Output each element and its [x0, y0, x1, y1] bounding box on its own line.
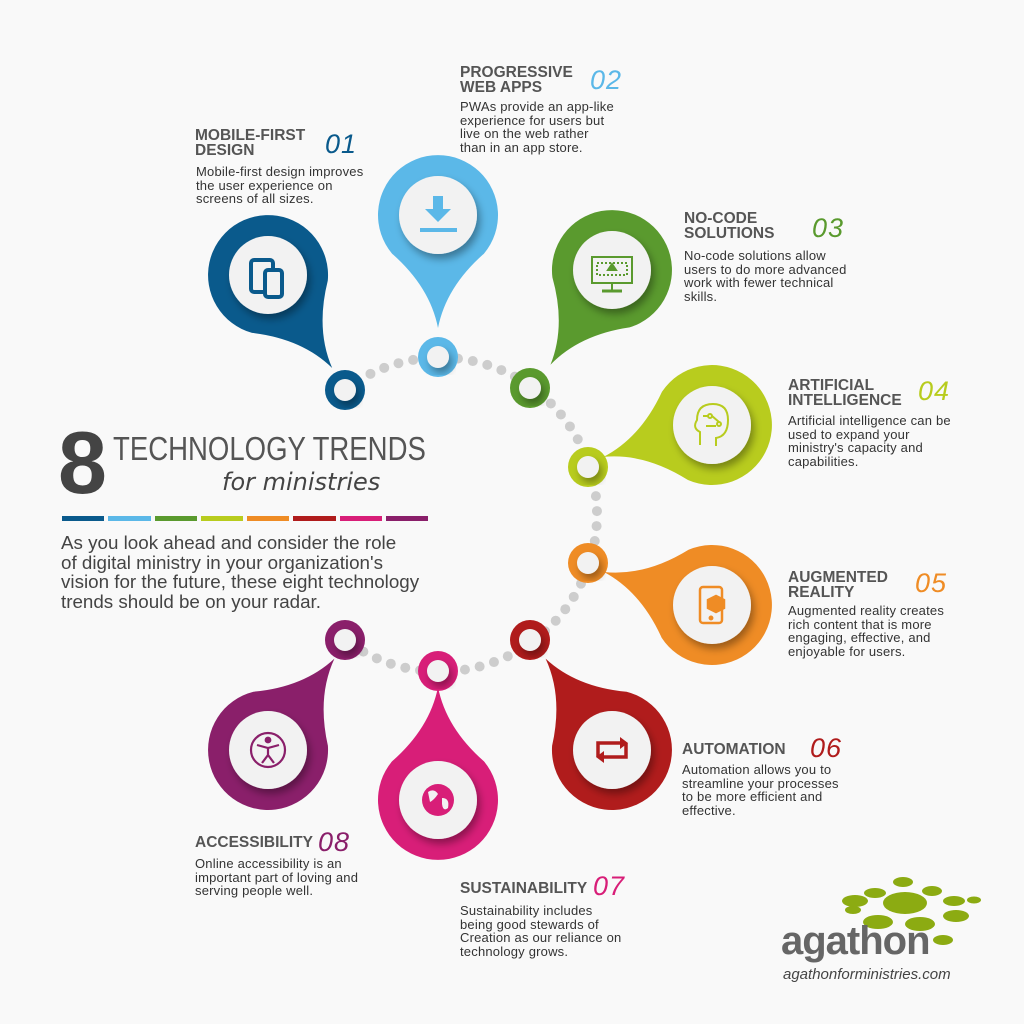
icon: monitor [592, 257, 632, 291]
text 4: ministry's capacity and [788, 440, 923, 455]
number 07: 07 [593, 871, 625, 901]
pin 6: automation [497, 623, 696, 834]
color bars [62, 516, 428, 521]
logo text: agathon [781, 919, 930, 963]
text 7: Sustainability includes [460, 903, 593, 918]
heading: 3 [684, 210, 774, 242]
text 4: Artificial intelligence can be [788, 413, 951, 428]
heading: 2: WEB APPS [460, 79, 542, 96]
text 3 [684, 248, 847, 304]
number 06: 06 [810, 733, 842, 763]
text 2: PWAs provide an app-like [460, 99, 614, 114]
text 7: being good stewards of [460, 916, 599, 932]
text 8: important part of loving and [195, 870, 358, 884]
icon: refresh arrows [596, 737, 628, 763]
number 05: 05 [915, 568, 947, 598]
text 5: rich content that is more [788, 616, 932, 632]
text 4: capabilities. [788, 454, 859, 468]
heading: 6: AUTOMATION [682, 741, 786, 758]
title block [58, 413, 426, 512]
title text: TECHNOLOGY TRENDS [113, 430, 426, 467]
heading: 5: AUGMENTED [788, 569, 888, 586]
text 2: than in an app store. [460, 140, 583, 154]
text 2: experience for users but [460, 112, 604, 128]
pin 5: AR [586, 515, 787, 680]
pin 1: mobile-first [185, 192, 382, 402]
heading: 8: ACCESSIBILITY [195, 834, 313, 851]
heading: 5 [788, 569, 888, 601]
number 01: 01 [325, 129, 357, 159]
text 7: technology grows. [460, 944, 568, 958]
number 08: 08 [318, 827, 350, 857]
text 4 [788, 413, 951, 468]
icon: accessibility person [251, 733, 285, 767]
heading: 1 [195, 127, 306, 159]
text 8: serving people well. [195, 883, 313, 898]
nodes [325, 337, 608, 691]
dotted connector arc [345, 358, 597, 672]
intro paragraph [61, 532, 420, 612]
text 8: Online accessibility is an [195, 856, 342, 871]
text 6: effective. [682, 802, 736, 818]
text 8 [195, 856, 358, 898]
icon: phone cube [700, 587, 724, 623]
text 1: Mobile-first design improves [196, 164, 363, 179]
pin 3: no-code [500, 187, 695, 397]
heading: 7: SUSTAINABILITY [460, 880, 587, 897]
text 1: the user experience on [196, 178, 333, 192]
icon: globe [422, 784, 454, 816]
logo url: agathonforministries.com [783, 966, 951, 983]
heading: 2: PROGRESSIVE [460, 64, 573, 81]
text 5: Augmented reality creates [788, 603, 944, 618]
text 3: users to do more advanced [684, 262, 847, 276]
number 02: 02 [590, 65, 622, 95]
text 6 [682, 762, 839, 818]
intro paragraph: trends should be on your radar. [61, 591, 321, 612]
intro paragraph: vision for the future, these eight technology [61, 571, 419, 592]
text 3: skills. [684, 288, 717, 304]
text 5 [788, 603, 944, 658]
text 2 [460, 99, 614, 154]
number 04: 04 [918, 376, 950, 406]
pin 8: accessibility [184, 623, 383, 834]
subtitle: for ministries [222, 468, 380, 496]
text 6: streamline your processes [682, 776, 839, 790]
text 3: No-code solutions allow [684, 248, 826, 263]
icon: head circuit [695, 404, 728, 446]
text 2: live on the web rather [460, 126, 589, 141]
text 7: Creation as our reliance on [460, 930, 622, 945]
logo: green dots [842, 877, 981, 945]
heading: 4: INTELLIGENCE [788, 392, 902, 409]
big 8: 8 [58, 413, 107, 512]
heading: 1: DESIGN [195, 142, 254, 159]
heading: 2 [460, 64, 573, 96]
heading: 1: MOBILE-FIRST [195, 127, 305, 144]
text 1 [196, 164, 363, 206]
intro paragraph: of digital ministry in your organization's [61, 552, 383, 573]
text 1: screens of all sizes. [196, 191, 314, 206]
icon: devices [251, 260, 282, 297]
pin 7: sustainability [378, 687, 498, 860]
text 6: to be more efficient and [682, 789, 822, 804]
heading: 5: REALITY [788, 584, 854, 601]
text 5: engaging, effective, and [788, 630, 931, 645]
intro paragraph: As you look ahead and consider the role [61, 532, 396, 553]
text 6: Automation allows you to [682, 762, 831, 777]
pin 2: PWA [378, 155, 498, 328]
heading: 3: NO-CODE [684, 210, 757, 227]
text 4: used to expand your [788, 426, 910, 442]
heading: 4: ARTIFICIAL [788, 377, 874, 394]
pin 4: AI [587, 351, 786, 514]
text 5: enjoyable for users. [788, 644, 905, 658]
heading: 3: SOLUTIONS [684, 225, 774, 242]
heading: 4 [788, 377, 902, 409]
text 3: work with fewer technical [684, 275, 834, 290]
number 03: 03 [812, 213, 844, 243]
text 7 [460, 903, 622, 958]
icon: download [420, 196, 457, 232]
